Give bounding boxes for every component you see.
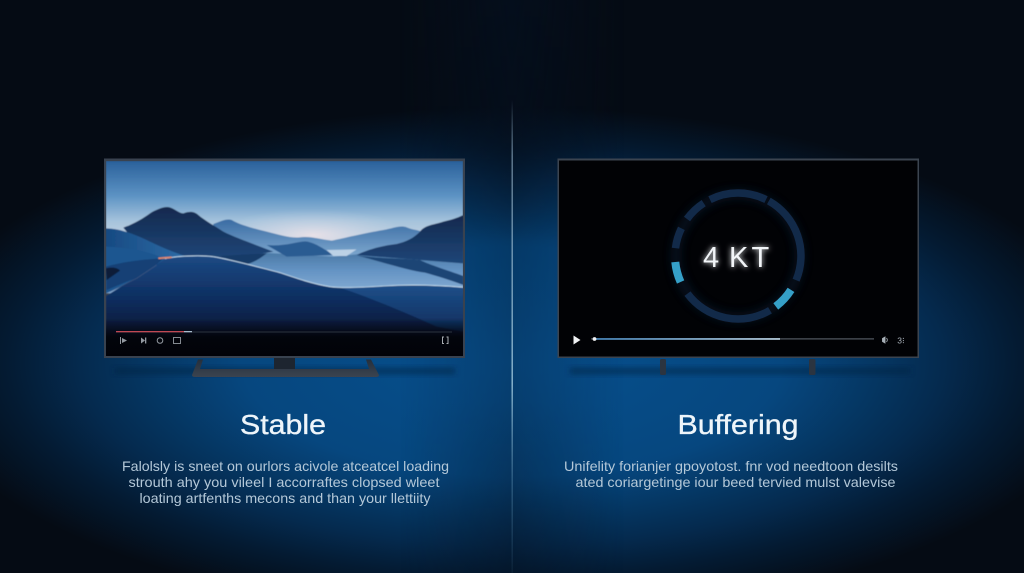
lake <box>106 248 463 293</box>
right mountains <box>357 215 463 263</box>
distant haze on water <box>327 249 357 256</box>
tv feet <box>660 359 816 375</box>
description: stable: Falolsly is sneet on ourlors acivole atceatcel loading <box>122 458 449 474</box>
description: buffering: Unifelity forianjer gpoyotost. fnr vod needtoon desilts <box>564 458 898 474</box>
left dunes <box>106 228 184 257</box>
right reflection <box>357 255 463 285</box>
mid hill <box>267 241 333 257</box>
right foreground <box>340 286 463 332</box>
tv bezel <box>104 158 465 358</box>
buffering ring <box>675 193 801 319</box>
description: stable: loating artfenths mecons and than your llettiity <box>140 490 430 506</box>
icon: volume <box>882 337 887 343</box>
left reflection <box>220 253 267 265</box>
ring active segments <box>675 262 791 306</box>
progress filled <box>594 338 780 340</box>
foreground dune <box>106 256 463 334</box>
icon: captions <box>174 338 180 344</box>
dune highlight <box>165 256 463 288</box>
description: buffering: ated coriargetinge iour beed tervied mulst valevise <box>576 474 896 490</box>
ring segments <box>676 193 801 319</box>
heading: stable: Stable <box>240 409 326 440</box>
ring glow <box>676 194 800 318</box>
progress knob <box>593 337 596 341</box>
player bar fade <box>106 318 463 356</box>
buffering television <box>558 158 919 375</box>
progress track <box>591 338 874 340</box>
center divider <box>512 100 513 573</box>
icon: repeat <box>157 338 163 343</box>
far mountains <box>213 220 433 257</box>
panel: buffering <box>558 158 919 490</box>
left mountain <box>123 207 273 258</box>
black screen <box>559 160 918 356</box>
stable television <box>104 158 465 377</box>
icon: fullscreen <box>442 337 448 344</box>
warm highlight <box>158 256 172 260</box>
icon: play <box>120 337 127 344</box>
icon: play <box>574 336 580 344</box>
player controls <box>574 336 905 346</box>
tv stand <box>192 358 379 377</box>
description: stable <box>122 458 449 506</box>
panel: stable <box>104 158 465 506</box>
progress bar <box>116 331 452 332</box>
player controls <box>120 337 448 344</box>
4KT label: 4KT <box>703 242 770 274</box>
tv shadow <box>570 368 910 374</box>
tv bezel <box>558 158 919 358</box>
sky <box>106 161 463 241</box>
heading: buffering: Buffering <box>678 409 798 440</box>
icon: skip <box>141 338 146 344</box>
tv shadow <box>115 368 455 374</box>
description: stable: strouth ahy you vileel I accorraftes clopsed wleet <box>128 474 440 490</box>
icon: settings: 3⁝ <box>897 336 905 346</box>
description: buffering <box>564 458 898 490</box>
landscape screen <box>106 161 463 356</box>
